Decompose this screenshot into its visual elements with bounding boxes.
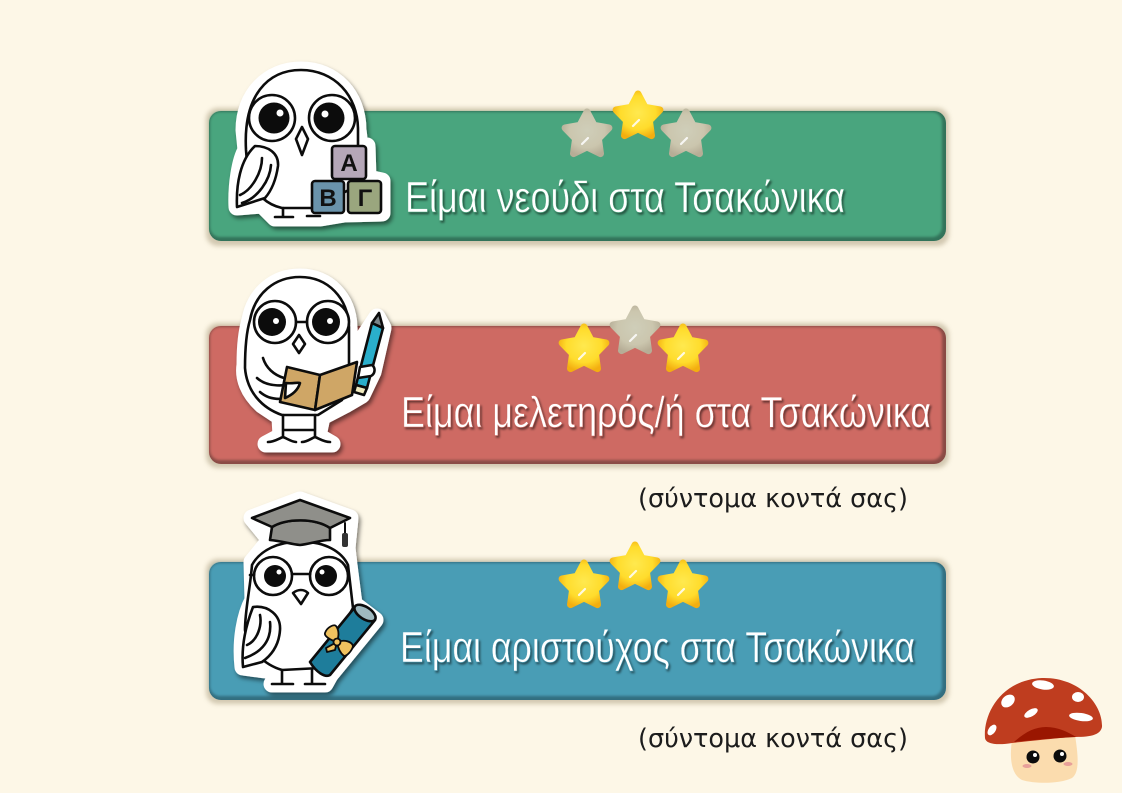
icon: stars row 2 — [562, 309, 705, 369]
icon: owl with blocks — [237, 70, 382, 218]
icon: owl with blocks: Α — [340, 150, 358, 177]
heading: red bar text: Είμαι μελετηρός/ή στα Τσακώνικα — [401, 388, 931, 437]
icon: mushroom — [985, 678, 1102, 783]
icon: owl with cap and diploma — [242, 500, 378, 684]
icon: owl with blocks: Γ — [358, 185, 373, 212]
icon: stars row 3 — [562, 545, 705, 605]
text block: coming soon 2: (σύντομα κοντά σας) — [638, 724, 908, 754]
icon: stars row 1 — [565, 94, 708, 154]
panel: blue bar — [206, 559, 949, 704]
heading: green bar text: Είμαι νεούδι στα Τσακώνικα — [405, 173, 845, 222]
icon: owl with book and pencil — [245, 277, 383, 444]
heading: blue bar text: Είμαι αριστούχος στα Τσακώνικα — [400, 623, 915, 672]
text block: coming soon 1: (σύντομα κοντά σας) — [638, 484, 908, 514]
icon: owl with blocks: Β — [319, 185, 337, 212]
panel: green bar — [206, 108, 949, 246]
panel: red bar — [206, 323, 949, 468]
